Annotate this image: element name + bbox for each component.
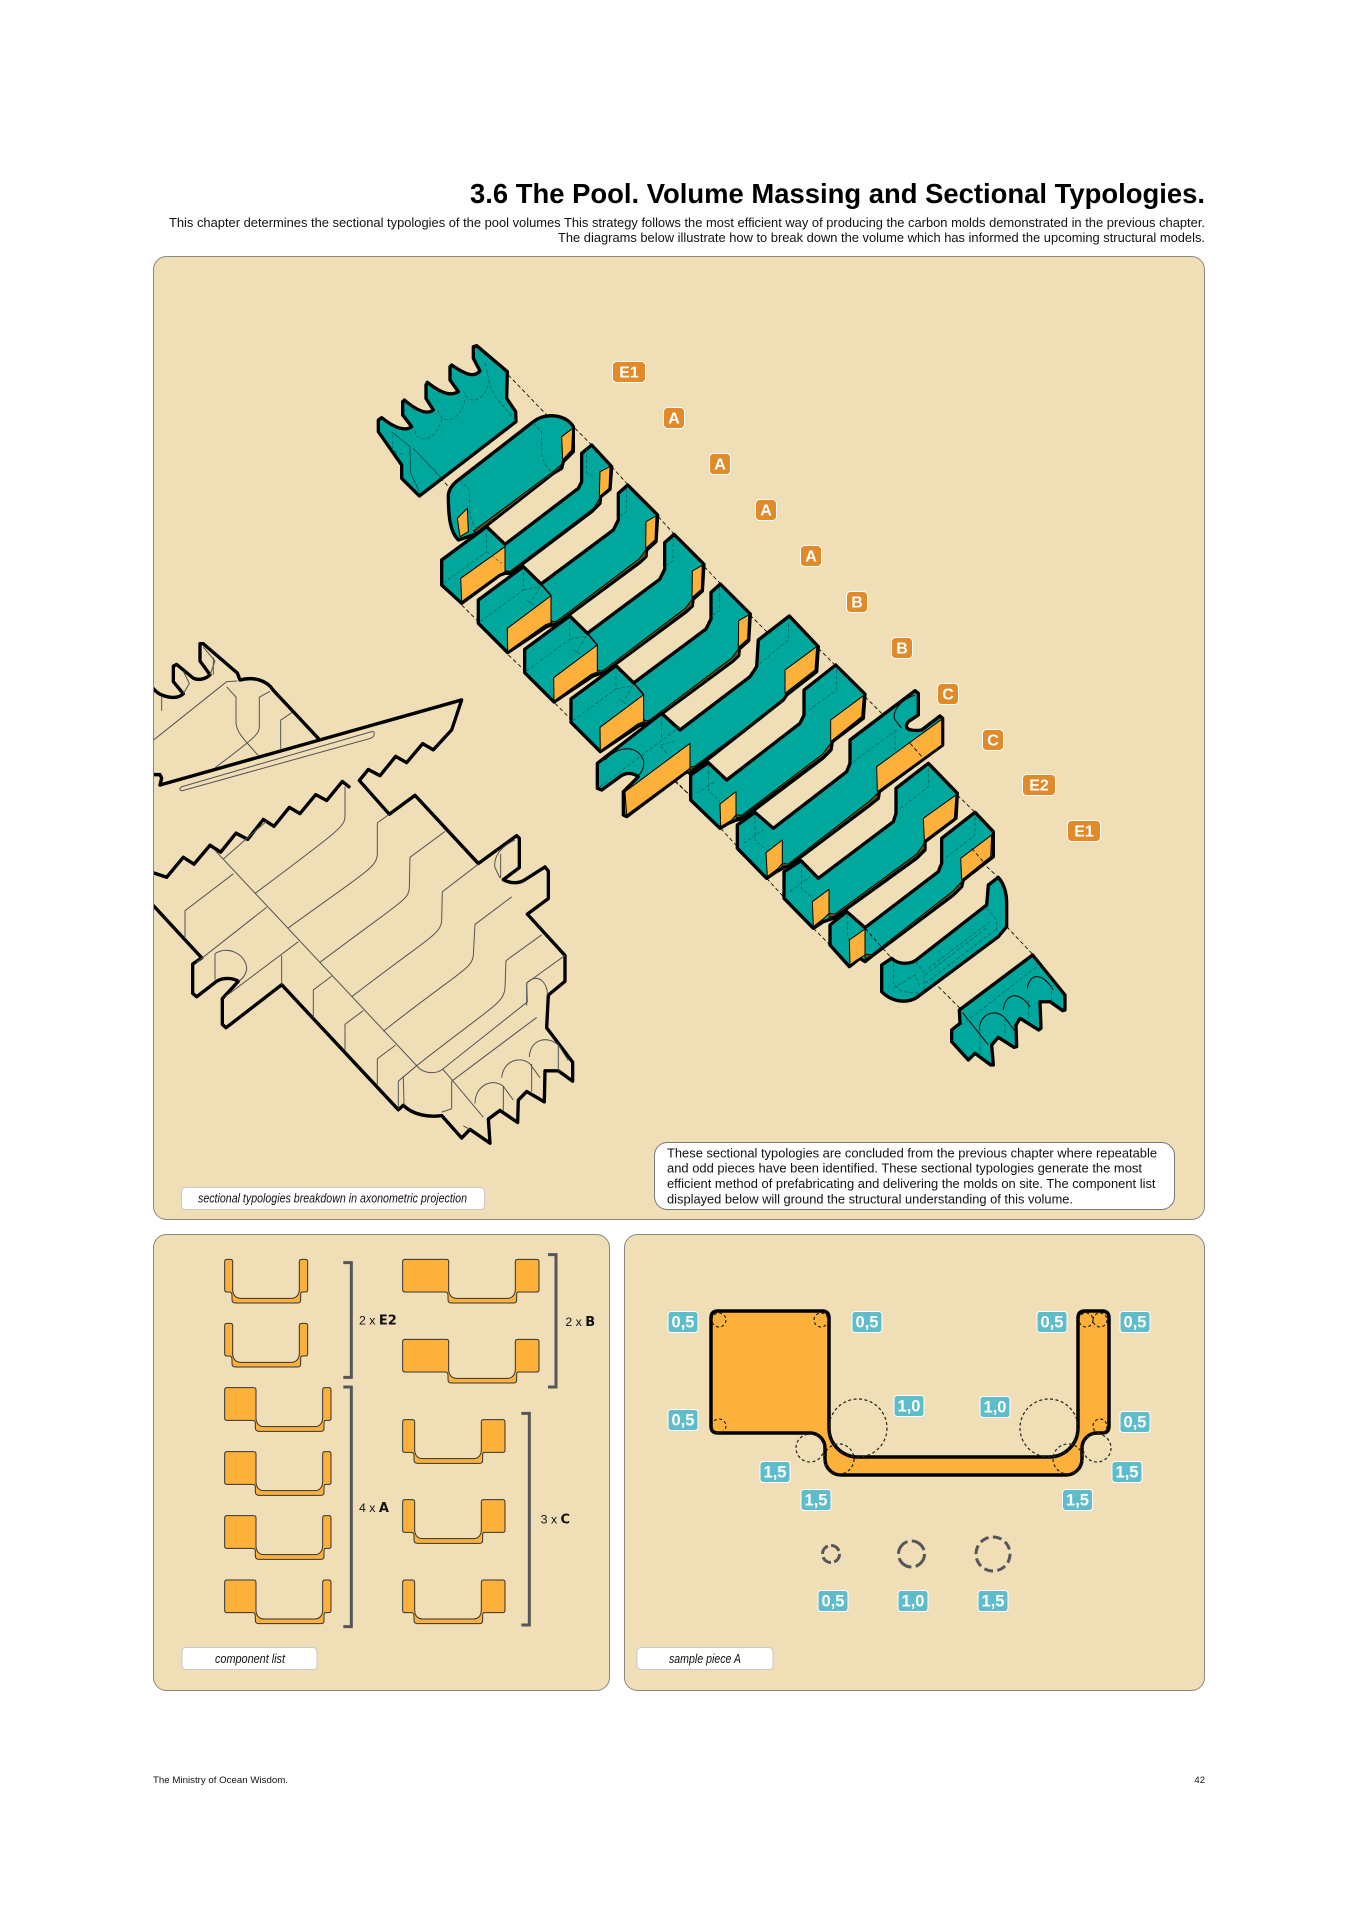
label E1 — [612, 362, 646, 382]
intro text — [169, 215, 1205, 245]
quantity labels: 2 x B — [565, 1315, 595, 1330]
components A x 4 — [225, 1388, 331, 1624]
label E2 — [1022, 774, 1056, 796]
radius value badges — [668, 1312, 1150, 1612]
radius value badges: 1,5 — [1066, 1492, 1089, 1510]
radius value badges: 0,5 — [856, 1314, 878, 1332]
label C: C — [987, 732, 999, 750]
radius value badges: 0,5 — [672, 1314, 694, 1332]
piece B first — [597, 616, 818, 817]
quantity labels: 2 x E2 — [359, 1314, 397, 1329]
title: 3.6 The Pool. Volume Massing and Sectional Typologies. — [470, 178, 1205, 209]
caption: axonometric: sectional typologies breakdown in axonometric projection — [198, 1192, 467, 1206]
intro text: The diagrams below illustrate how to break down the volume which has informed the upcoming structural models. — [558, 230, 1205, 245]
callout text: efficient method of prefabricating and delivering the molds on site. The component list — [667, 1176, 1156, 1191]
section profile of piece A — [711, 1311, 1109, 1475]
radius value badges: 1,5 — [982, 1592, 1004, 1610]
components B x 2 — [403, 1259, 539, 1383]
radius value badges: 0,5 — [672, 1412, 694, 1430]
quantity labels: 3 x C — [541, 1513, 570, 1528]
label C — [982, 730, 1004, 750]
piece B-type third — [784, 763, 957, 928]
radius legend circles — [822, 1537, 1010, 1571]
piece E2 top slab — [448, 416, 573, 540]
label B: B — [851, 594, 863, 612]
exploded teal pieces, lower half — [675, 665, 1065, 1065]
callout text: and odd pieces have been identified. These sectional typologies generate the most — [667, 1160, 1142, 1176]
label C: C — [942, 686, 954, 704]
label A: A — [668, 410, 680, 428]
label A: A — [805, 548, 817, 566]
label E2: E2 — [1029, 778, 1049, 794]
projection guide lines — [413, 375, 835, 795]
radius value badges: 1,0 — [898, 1398, 920, 1416]
label A — [664, 408, 684, 428]
label E1 — [1068, 820, 1100, 842]
caption: sample piece A — [637, 1648, 773, 1670]
radius value badges: 1,0 — [984, 1398, 1006, 1416]
radius value badges: 1,5 — [805, 1492, 827, 1510]
piece E1 — [378, 346, 516, 496]
label B — [892, 638, 912, 658]
page number: 42 — [1194, 1775, 1205, 1786]
piece E2 bottom — [830, 812, 993, 967]
piece E2 bottom slab — [882, 877, 1007, 1001]
label C — [938, 684, 958, 704]
bracket B — [548, 1255, 556, 1387]
piece A fourth — [571, 584, 750, 752]
panel: sample piece A — [624, 1234, 1204, 1690]
label A — [756, 500, 776, 520]
components C x 3 — [403, 1420, 505, 1624]
piece B second — [691, 665, 865, 828]
label A: A — [714, 456, 726, 474]
intro text: This chapter determines the sectional typologies of the pool volumes This strategy follows the most efficient way of producing the carbon molds demonstrated in the previous chapter. — [169, 215, 1205, 230]
radius value badges: 1,0 — [902, 1592, 924, 1610]
label B: B — [896, 640, 908, 658]
radius circles — [712, 1313, 1111, 1474]
piece C first — [737, 691, 943, 878]
quantity labels: 4 x A — [359, 1501, 389, 1516]
panel: component list — [154, 1234, 610, 1690]
piece A third — [525, 534, 704, 702]
bracket E2 — [343, 1263, 351, 1377]
radius value badges: 0,5 — [1124, 1414, 1146, 1432]
caption: axonometric — [182, 1188, 484, 1210]
radius value badges: 1,5 — [764, 1464, 786, 1482]
radius value badges: 0,5 — [1041, 1314, 1063, 1332]
caption: component list: component list — [215, 1652, 285, 1666]
piece A first (narrow wall) — [442, 445, 612, 603]
callout text: These sectional typologies are concluded from the previous chapter where repeatable — [667, 1146, 1157, 1160]
radius value badges: 1,5 — [1116, 1464, 1138, 1482]
piece E1 bottom — [952, 955, 1065, 1065]
typology labels — [612, 362, 1100, 842]
radius value badges: 0,5 — [822, 1592, 844, 1610]
label E1: E1 — [619, 364, 639, 382]
caption: sample piece A: sample piece A — [669, 1652, 741, 1666]
quantity labels — [359, 1314, 595, 1528]
exploded teal pieces, upper half — [378, 346, 835, 817]
projection guide lines — [675, 697, 1033, 1008]
outline axonometric assembled volume — [153, 644, 573, 1143]
piece A second — [478, 485, 658, 653]
components E2 x 2 — [225, 1259, 308, 1367]
label A — [710, 454, 730, 474]
caption: component list — [182, 1648, 317, 1670]
label E1: E1 — [1074, 824, 1094, 840]
bracket A — [343, 1387, 351, 1627]
callout text: displayed below will ground the structural understanding of this volume. — [667, 1192, 1073, 1206]
callout text — [654, 1142, 1174, 1210]
label A — [800, 546, 822, 566]
label A: A — [760, 502, 772, 520]
label B — [846, 592, 868, 612]
radius value badges: 0,5 — [1124, 1314, 1146, 1332]
bracket C — [521, 1413, 529, 1625]
footer left: The Ministry of Ocean Wisdom. — [153, 1775, 288, 1786]
panel: axonometric breakdown — [153, 256, 1205, 1220]
